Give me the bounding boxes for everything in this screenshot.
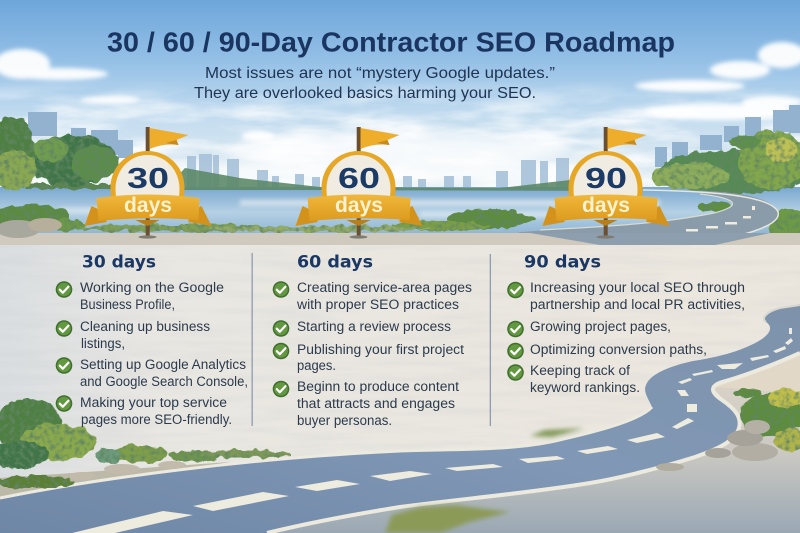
checklist: 90 days: partnership and local PR activities, [530,297,745,312]
checklist: 30 days: Working on the Google [80,280,224,295]
checklist: 30 days: Making your top service [80,395,227,410]
checklist: 30 days: Cleaning up business [80,319,210,334]
checklist: 90 days: keyword rankings. [530,380,640,395]
clouds [0,42,800,195]
title: 30 / 60 / 90-Day Contractor SEO Roadmap [107,26,675,58]
bushes and trees: lower left [0,399,290,488]
panel: 30 days [56,252,248,427]
checklist: 60 days [273,280,472,428]
panel: 60 days [273,252,472,428]
checklist: 60 days: Creating service-area pages [297,280,472,295]
ground below road [267,353,800,533]
checklist: 60 days: Beginn to produce content [297,379,459,394]
marble panel [0,245,800,533]
checklist: 30 days: Business Profile, [80,297,175,312]
trees: left [0,116,125,231]
sky background [0,0,800,195]
badge: 90 days [542,127,670,239]
checklist: 30 days: Setting up Google Analytics [80,357,246,372]
grass: road edge [530,428,585,437]
far shoreline [170,168,640,191]
ground strip [0,233,800,247]
column divider one [252,253,253,426]
badge: 90 days: 90 [585,163,627,195]
ground bottom left [0,462,230,500]
badge: 90 days: days [582,194,630,217]
checklist: 60 days: that attracts and engages [297,396,455,411]
checklist: 30 days: pages more SEO-friendly. [81,412,232,427]
checklist: 30 days [56,280,248,427]
badge: 60 days [296,127,422,239]
checklist: 90 days: Keeping track of [530,363,630,378]
checklist: 60 days: with proper SEO practices [296,297,459,312]
badge: 30 days: days [124,194,172,217]
badge: 60 days: 60 [338,163,380,195]
checklist: 60 days: pages. [297,358,336,373]
checklist: 30 days: listings, [81,336,125,351]
panel: 90 days [507,252,745,395]
checklist: 90 days: Growing project pages, [530,319,671,334]
checklist: 90 days: Optimizing conversion paths, [530,342,707,357]
foreground shrubs [80,209,534,232]
ground right of road bend [715,353,800,395]
checklist: 60 days: buyer personas. [297,413,392,428]
checklist: 90 days [507,280,745,395]
trees: right [650,130,800,241]
heading: 90 days: 90 days [524,252,601,272]
winding road [0,304,800,533]
city skyline [28,105,800,188]
checklist: 60 days: Publishing your first project [297,342,464,357]
checklist: 60 days: Starting a review process [297,319,451,334]
rocks: upper left [0,218,62,238]
rocks: lower left [69,461,186,480]
road centre dashes [72,328,793,533]
heading: 60 days: 60 days [297,252,373,272]
checklist: 90 days: Increasing your local SEO through [530,280,745,295]
bushes: lower right [734,389,800,452]
heading: 30 days: 30 days [82,252,156,272]
subtitle: Most issues are not “mystery Google updates.” [205,65,555,82]
subtitle [194,65,555,102]
subtitle: They are overlooked basics harming your SEO. [194,85,536,102]
upper road bend [500,189,778,243]
grass: bottom centre [385,505,510,533]
badge: 30 days: 30 [127,163,169,195]
badge: 60 days: days [335,194,383,217]
checklist: 30 days: and Google Search Console, [80,374,248,389]
badge: 30 days [84,127,212,239]
column divider two [490,254,491,426]
rocks: lower right [656,420,778,471]
lake [0,187,800,233]
